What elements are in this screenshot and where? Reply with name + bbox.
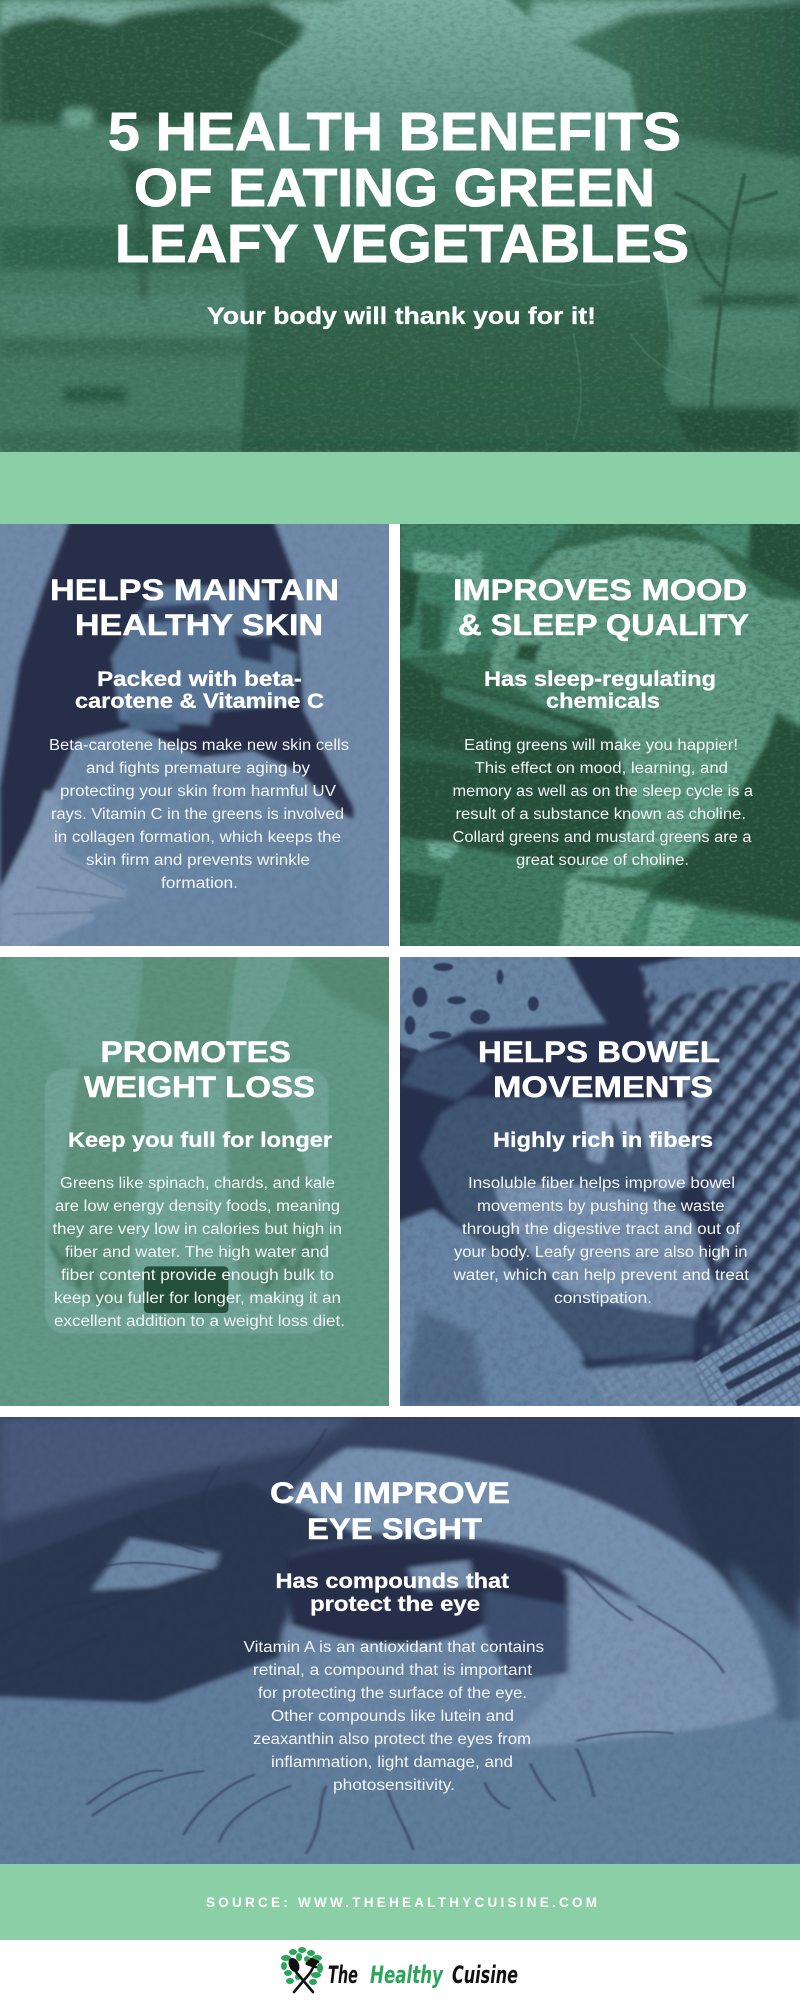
subheading: Has sleep-regulating	[484, 668, 716, 691]
title	[108, 102, 689, 274]
body text: Collard greens and mustard greens are a	[452, 829, 752, 846]
panel: hero photo with title	[0, 0, 800, 453]
body text: keep you fuller for longer, making it an	[54, 1290, 341, 1307]
heading	[453, 574, 749, 642]
dark forearm	[400, 1044, 493, 1100]
left side	[0, 0, 348, 39]
photo: woman with dark hair, blue duotone	[0, 521, 389, 947]
source band	[0, 1864, 800, 1940]
title: LEAFY VEGETABLES	[115, 214, 689, 274]
logo wordmark	[328, 1961, 518, 1989]
lower leaves and leg	[400, 839, 567, 947]
eye white right	[510, 1568, 775, 1748]
patterned bedding	[393, 950, 607, 1054]
heading: WEIGHT LOSS	[84, 1071, 315, 1104]
body text: your body. Leafy greens are also high in	[454, 1244, 748, 1261]
leaves background	[400, 524, 573, 657]
subheading: Packed with beta-	[97, 668, 302, 691]
body text: formation.	[161, 875, 238, 892]
panel: helps bowel movements	[393, 950, 800, 1424]
hero photo: girl in a field, green duotone	[0, 0, 800, 453]
body text: rays. Vitamin C in the greens is involved	[51, 806, 344, 823]
body text: Beta-carotene helps make new skin cells	[49, 737, 349, 754]
body text: zeaxanthin also protect the eyes from	[253, 1731, 531, 1748]
heading	[84, 1036, 315, 1104]
icon: tree with crossed spoon and fork	[281, 1947, 323, 1992]
heading: EYE SIGHT	[307, 1513, 482, 1546]
body text: through the digestive tract and out of	[462, 1221, 741, 1238]
body text: in collagen formation, which keeps the	[54, 829, 341, 846]
body text: Insoluble fiber helps improve bowel	[468, 1175, 735, 1192]
subheading	[484, 668, 716, 713]
body text: are low energy density foods, meaning	[55, 1198, 340, 1215]
left dark lash area	[0, 1481, 357, 1703]
panel: improves mood and sleep quality	[400, 521, 800, 947]
photo: feet on a bathroom scale, green duotone	[0, 954, 393, 1406]
subheading: Highly rich in fibers	[493, 1129, 713, 1152]
shoulder and back	[72, 730, 206, 758]
body text	[452, 1175, 750, 1307]
eyelashes	[0, 1429, 724, 1854]
title: OF EATING GREEN	[134, 158, 655, 218]
body text	[244, 1639, 544, 1794]
body text: inflammation, light damage, and	[271, 1754, 513, 1771]
logo wordmark: Healthy	[370, 1961, 444, 1989]
sapling on the right	[675, 173, 778, 440]
logo: The Healthy Cuisine	[281, 1947, 518, 1992]
body text: Eating greens will make you happier!	[464, 737, 738, 754]
lower left leg	[393, 1209, 617, 1417]
iris	[280, 1549, 566, 1752]
heading: HELPS BOWEL	[478, 1036, 720, 1069]
body text: retinal, a compound that is important	[253, 1662, 533, 1679]
subheading	[276, 1570, 509, 1616]
body text: result of a substance known as choline.	[456, 806, 746, 823]
hair mass	[0, 521, 353, 891]
koala fur	[490, 536, 800, 877]
heading: HELPS MAINTAIN	[50, 574, 339, 607]
logo wordmark: The	[328, 1961, 358, 1989]
body text: excellent addition to a weight loss diet.	[54, 1313, 345, 1330]
lower lid and skin	[0, 1658, 800, 1876]
body text: skin firm and prevents wrinkle	[86, 852, 310, 869]
lower hand	[495, 1184, 717, 1317]
heading: PROMOTES	[100, 1036, 291, 1069]
title: 5 HEALTH BENEFITS	[108, 102, 681, 162]
photo: koala on a branch, green duotone	[400, 521, 800, 947]
face	[112, 586, 297, 731]
plaid shirt	[640, 954, 800, 1357]
body text: fiber and water. The high water and	[65, 1244, 329, 1261]
heading	[270, 1477, 510, 1546]
body text: photosensitivity.	[333, 1777, 455, 1794]
body text	[52, 1175, 345, 1330]
body text: fiber content provide enough bulk to	[61, 1267, 334, 1284]
branch	[400, 659, 633, 867]
body text: Vitamin A is an antioxidant that contains	[244, 1639, 544, 1656]
body text: they are very low in calories but high in	[52, 1221, 342, 1238]
source text: SOURCE: WWW.THEHEALTHYCUISINE.COM	[206, 1895, 597, 1910]
panel: helps maintain healthy skin	[0, 521, 389, 947]
heading: CAN IMPROVE	[270, 1477, 510, 1510]
subheading: Keep you full for longer	[68, 1129, 332, 1152]
upper hand	[582, 1100, 688, 1192]
upper eyelid band	[255, 1448, 778, 1707]
heading: IMPROVES MOOD	[453, 574, 747, 607]
subheading: protect the eye	[310, 1593, 480, 1616]
body text: memory as well as on the sleep cycle is a	[452, 783, 753, 800]
body text: Other compounds like lutein and	[271, 1708, 514, 1725]
subheading	[75, 668, 324, 713]
body text: and fights premature aging by	[86, 760, 310, 777]
subheading: Has compounds that	[276, 1570, 509, 1593]
scale display	[144, 1266, 228, 1313]
body text: water, which can help prevent and treat	[452, 1267, 750, 1284]
body text: for protecting the surface of the eye.	[258, 1685, 527, 1702]
panel: can improve eye sight	[0, 1402, 800, 1876]
heading	[50, 574, 339, 642]
scale platform	[45, 1069, 328, 1334]
heading: HEALTHY SKIN	[75, 609, 323, 642]
logo wordmark: Cuisine	[452, 1961, 518, 1989]
subheading: chemicals	[546, 690, 660, 713]
heading: & SLEEP QUALITY	[458, 609, 749, 642]
body text: great source of choline.	[516, 852, 689, 869]
body text: constipation.	[554, 1290, 652, 1307]
body text: Greens like spinach, chards, and kale	[60, 1175, 335, 1192]
left lid light patch	[92, 1538, 219, 1590]
green band under hero	[0, 452, 800, 524]
heading	[478, 1036, 720, 1104]
subheading: carotene & Vitamine C	[75, 690, 324, 713]
body text	[49, 737, 349, 892]
body text: protecting your skin from harmful UV	[60, 783, 337, 800]
legs and feet	[48, 1067, 143, 1310]
upper brow skin	[0, 1402, 800, 1598]
girl silhouette	[240, 0, 723, 452]
hot water bottle	[420, 1097, 700, 1369]
heading: MOVEMENTS	[493, 1071, 713, 1104]
right side	[676, 293, 792, 406]
body text: movements by pushing the waste	[477, 1198, 724, 1215]
body text: This effect on mood, learning, and	[474, 760, 728, 777]
panel: promotes weight loss	[0, 954, 393, 1406]
photo: close-up of an eye, blue duotone	[0, 1402, 800, 1876]
subtitle: Your body will thank you for it!	[207, 303, 596, 330]
body text	[452, 737, 753, 869]
photo: hands on a hot water bottle, blue duotone	[393, 950, 800, 1424]
hand	[0, 791, 127, 947]
